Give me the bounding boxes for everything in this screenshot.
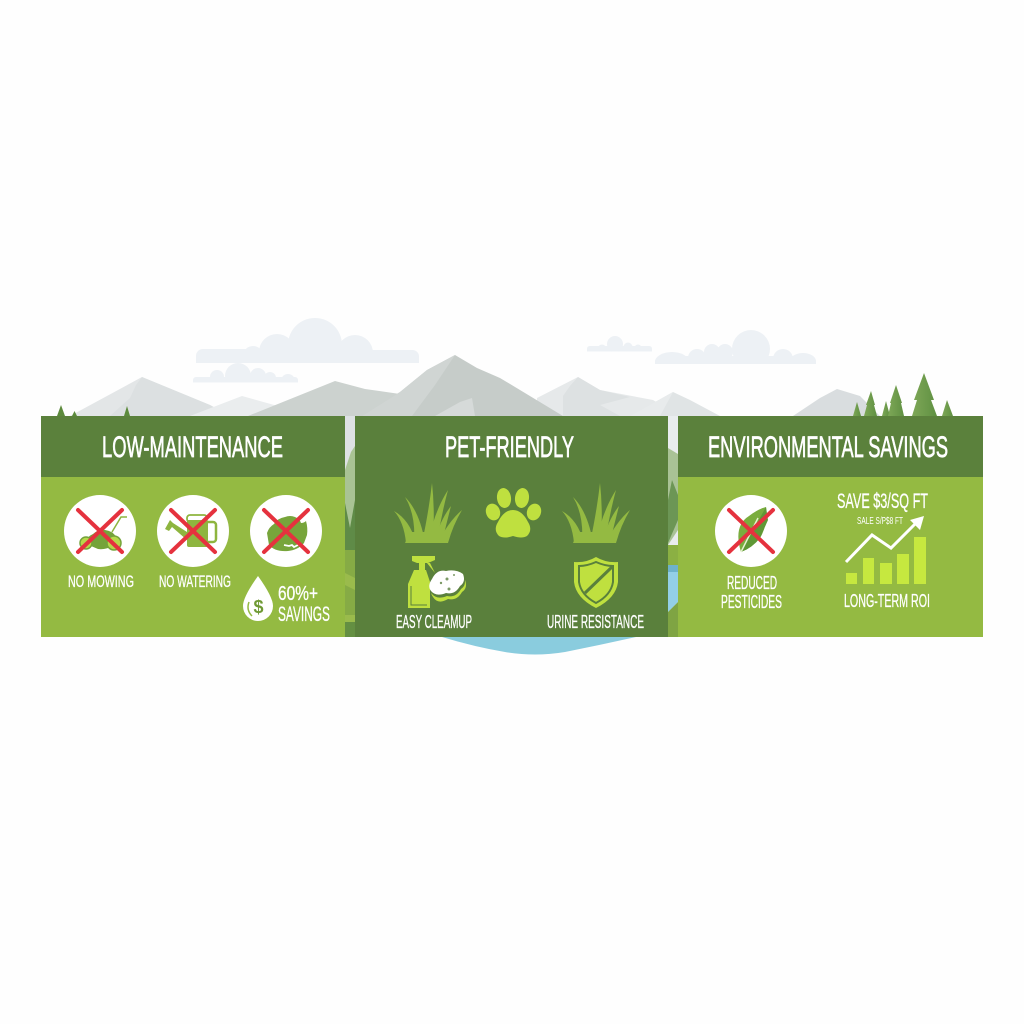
clouds bbox=[193, 318, 816, 389]
label: easy cleanup: EASY CLEAMUP bbox=[396, 612, 472, 632]
label: savings: 60%+ bbox=[278, 583, 318, 605]
label: savings bbox=[278, 583, 330, 626]
icon: water drop with dollar: $ bbox=[253, 597, 264, 617]
header band bbox=[678, 416, 983, 477]
label: save per square foot: SAVE $3/SQ FT bbox=[837, 490, 928, 513]
background landscape bbox=[57, 318, 953, 654]
icon: grass left bbox=[394, 483, 462, 543]
header band bbox=[41, 416, 345, 477]
label: no mowing: NO MOWING bbox=[68, 572, 134, 591]
icon: spray bottle and sponge bbox=[408, 556, 466, 608]
heading: LOW-MAINTENANCE bbox=[102, 431, 283, 464]
right gap scenery bbox=[668, 416, 678, 637]
label: long-term roi: LONG-TERM ROI bbox=[844, 591, 930, 611]
label: reduced pesticides: PESTICIDES bbox=[721, 592, 782, 612]
water below center panel bbox=[442, 637, 636, 654]
mountains bbox=[70, 377, 230, 416]
icon: no mowing bbox=[64, 495, 136, 567]
label: small savings note: SALE S/P$8 FT bbox=[857, 516, 903, 527]
label: reduced pesticides: REDUCED bbox=[727, 573, 777, 593]
icon: no watering bbox=[157, 495, 229, 567]
label: urine resistance: URINE RESISTANCE bbox=[547, 612, 644, 632]
panel: environmental savings bbox=[678, 416, 983, 637]
chart: rising bars bbox=[846, 537, 926, 584]
heading: PET-FRIENDLY bbox=[445, 431, 574, 464]
trees left bbox=[57, 405, 130, 416]
left gap scenery bbox=[345, 416, 355, 637]
label: no watering: NO WATERING bbox=[159, 572, 231, 591]
icon: grass right bbox=[562, 483, 630, 543]
icon: water drop with dollar bbox=[243, 576, 273, 621]
icon: no fertilizer pile bbox=[250, 495, 322, 567]
icon: no pesticides leaf bbox=[715, 495, 787, 567]
label: savings: SAVINGS bbox=[278, 603, 330, 626]
icon: shield bbox=[574, 557, 618, 608]
trees right bbox=[853, 373, 953, 416]
arrow: upward trend bbox=[846, 516, 924, 562]
icon: paw bbox=[484, 487, 543, 538]
label: reduced pesticides bbox=[721, 573, 782, 612]
panel: low-maintenance bbox=[41, 416, 345, 637]
panel: pet-friendly bbox=[355, 416, 668, 637]
